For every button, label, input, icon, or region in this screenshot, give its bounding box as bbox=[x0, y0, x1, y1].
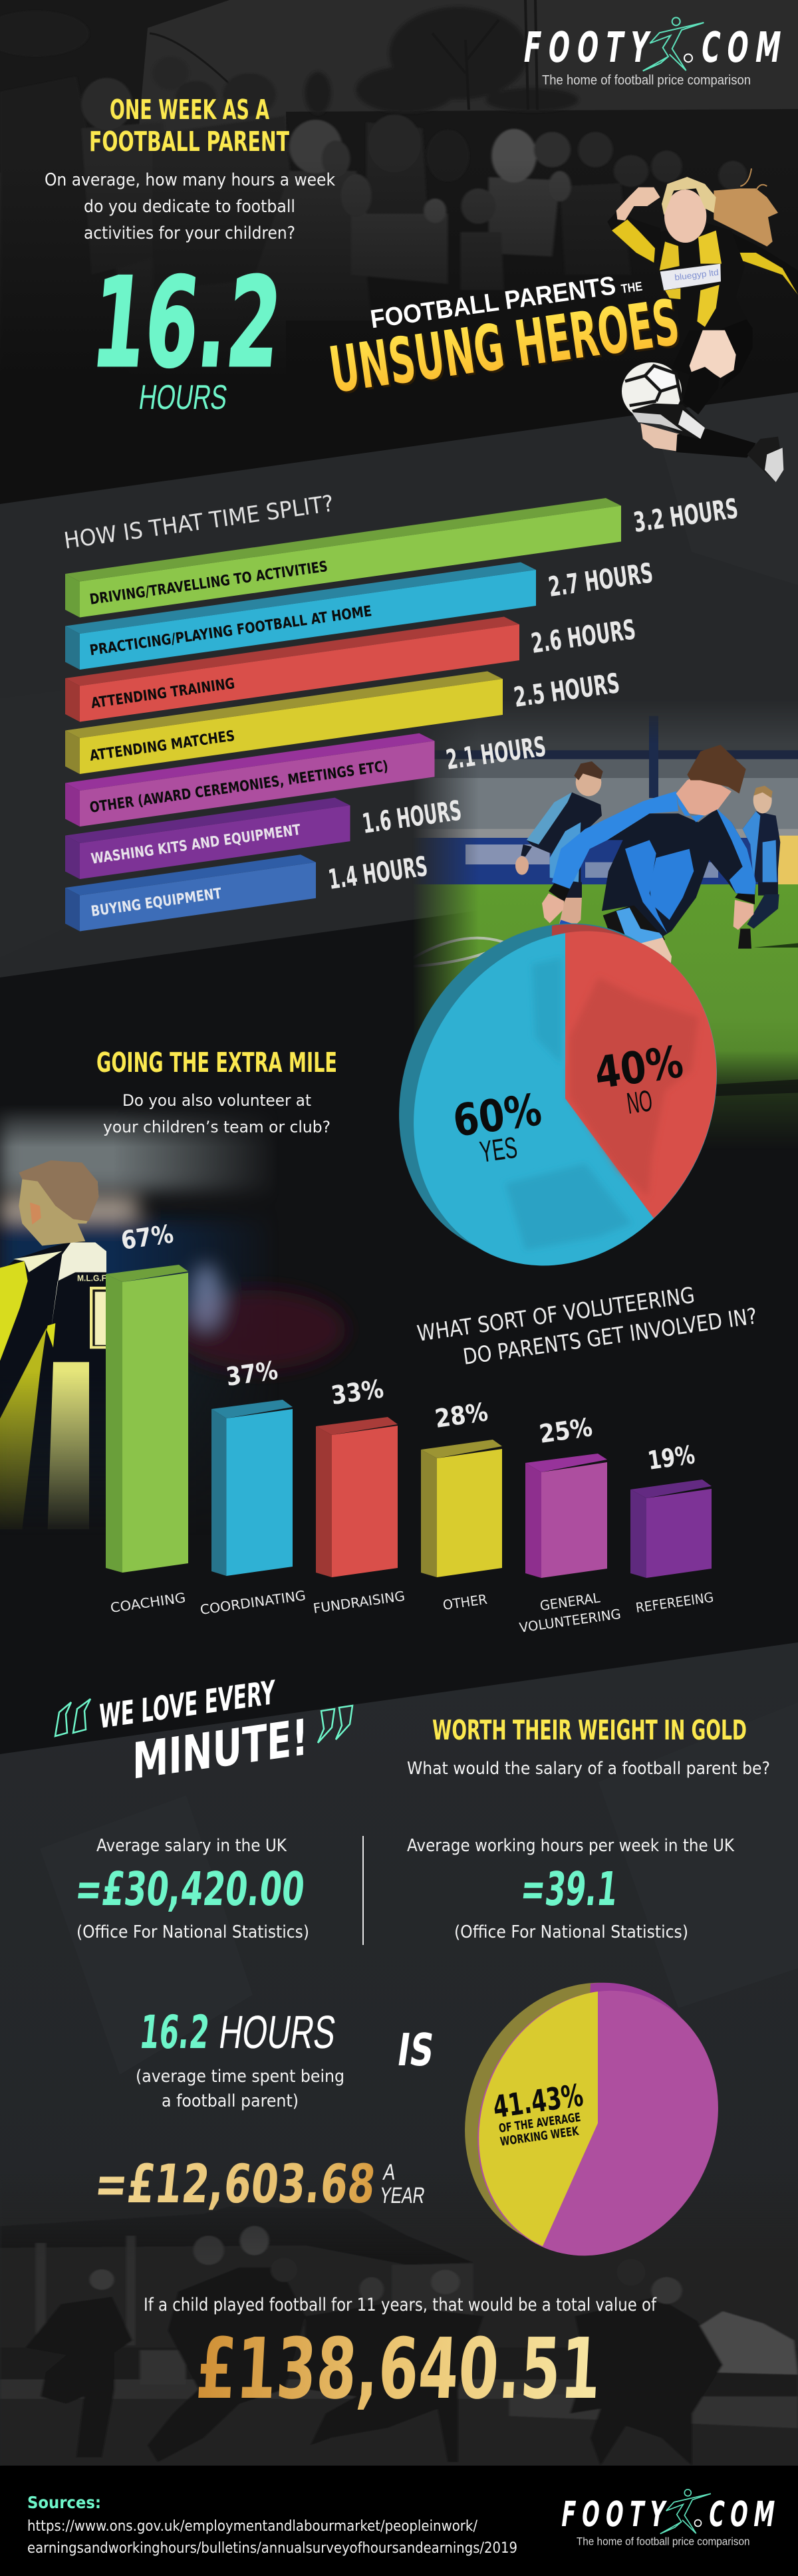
photo: boy footballers on pitch bbox=[406, 698, 798, 1150]
photo: boy in yellow shirt, rear view: M.L.G.F bbox=[77, 1273, 106, 1283]
title: football parents the unsung heroes: FOOTBALL PARENTS bbox=[368, 271, 618, 334]
bar: attending matches: ATTENDING MATCHES bbox=[88, 728, 236, 765]
bar: other 28%: 28% bbox=[433, 1397, 489, 1434]
stat: average working hours: Average working hours per week in the UK bbox=[407, 1836, 735, 1856]
photo: girl footballer bbox=[607, 168, 798, 482]
football bbox=[622, 362, 682, 420]
bar: other: OTHER (AWARD CEREMONIES, MEETINGS ETC) bbox=[88, 758, 389, 817]
stat: average working hours: (Office For National Statistics) bbox=[454, 1922, 688, 1942]
player silhouettes bbox=[25, 2267, 723, 2466]
footer background bbox=[0, 2466, 798, 2576]
bar: refereeing 19%: 19% bbox=[646, 1440, 697, 1476]
text: hours question: On average, how many hours a week bbox=[45, 170, 335, 190]
bar: general volunteering 25%: VOLUNTEERING bbox=[518, 1606, 622, 1636]
stat: average salary: =£30,420.00 bbox=[72, 1862, 307, 1916]
bar: driving bbox=[65, 492, 740, 617]
bar: fundraising 33%: FUNDRAISING bbox=[312, 1588, 406, 1616]
stat: average working hours: =39.1 bbox=[518, 1862, 620, 1916]
label: 60% yes: 60% bbox=[450, 1084, 545, 1147]
stat: average working hours bbox=[407, 1836, 735, 1942]
text: volunteer question: your children’s team or club? bbox=[103, 1118, 331, 1136]
icon: footballer figure bbox=[660, 2490, 711, 2534]
text: hours question: do you dedicate to football bbox=[84, 197, 295, 217]
bar: buying equipment bbox=[65, 850, 430, 931]
label: 40% no: 40% bbox=[592, 1036, 686, 1099]
text: hours question: activities for your children? bbox=[84, 223, 295, 243]
bar: coordinating 37%: 37% bbox=[224, 1355, 279, 1392]
bar: coaching 67%: 67% bbox=[119, 1219, 175, 1255]
stat: average salary bbox=[72, 1836, 309, 1942]
bar: other 28% bbox=[421, 1397, 502, 1613]
stat: 16.2 hours: 16.2 bbox=[86, 251, 287, 395]
text: eleven years value: If a child played football for 11 years, that would be a total value of bbox=[144, 2295, 657, 2315]
bar: refereeing 19%: REFEREEING bbox=[634, 1589, 715, 1616]
bar: coaching 67% bbox=[106, 1219, 188, 1616]
text: volunteer question: Do you also volunteer at bbox=[122, 1091, 311, 1110]
heading: one week as a football parent: ONE WEEK AS A bbox=[110, 94, 269, 126]
bar: refereeing 19% bbox=[630, 1440, 715, 1616]
heading: one week as a football parent bbox=[89, 94, 289, 158]
heading: how is that time split: HOW IS THAT TIME SPLIT? bbox=[63, 490, 335, 555]
logo: footy.com header bbox=[521, 17, 784, 88]
logo: footy.com header: The home of football price comparison bbox=[542, 73, 751, 88]
main player bbox=[542, 745, 756, 966]
bar: attending training bbox=[65, 613, 638, 722]
bar: buying equipment: BUYING EQUIPMENT bbox=[90, 886, 223, 920]
stat: 16.2 hours is: HOURS bbox=[216, 2005, 339, 2058]
text: is: IS bbox=[394, 2024, 438, 2076]
sources: https://www.ons.gov.uk/employmentandlabourmarket/peopleinwork/ bbox=[27, 2518, 478, 2535]
stat: 16.2 hours: HOURS bbox=[136, 378, 229, 417]
title: football parents the unsung heroes bbox=[325, 271, 686, 410]
pie chart: volunteer yes or no bbox=[341, 870, 775, 1319]
stat: 12,603.68 a year: A bbox=[382, 2160, 397, 2185]
bar: practicing: 2.7 HOURS bbox=[547, 557, 655, 603]
photo: celebrating young players bbox=[0, 2210, 798, 2466]
logo: footy.com footer: COM bbox=[706, 2495, 777, 2535]
quote: we love every minute: WE LOVE EVERY bbox=[99, 1673, 275, 1736]
sources: earningsandworkinghours/bulletins/annualsurveyofhoursandearnings/2019 bbox=[27, 2540, 517, 2557]
bar: other 28%: OTHER bbox=[442, 1591, 488, 1613]
label: 60% yes bbox=[450, 1084, 545, 1169]
bar: driving: DRIVING/TRAVELLING TO ACTIVITIES bbox=[88, 559, 329, 608]
title: football parents the unsung heroes: THE bbox=[620, 280, 643, 297]
bar: general volunteering 25%: 25% bbox=[537, 1412, 594, 1449]
photo: boy in yellow shirt, rear view bbox=[0, 1109, 349, 1529]
bar: attending training: 2.6 HOURS bbox=[529, 613, 638, 660]
sources: Sources: bbox=[27, 2493, 101, 2512]
panel: salary background bbox=[0, 1642, 798, 2466]
bar: coordinating 37%: COORDINATING bbox=[199, 1587, 307, 1618]
bar: attending matches: 2.5 HOURS bbox=[512, 667, 622, 713]
logo: footy.com footer: FOOTY bbox=[559, 2495, 668, 2535]
logo: footy.com header: COM bbox=[698, 23, 784, 72]
stat: average salary: Average salary in the UK bbox=[96, 1836, 287, 1856]
icon: footballer figure bbox=[643, 17, 704, 71]
stat: average salary: (Office For National Statistics) bbox=[76, 1922, 309, 1942]
bar: attending matches bbox=[65, 667, 622, 774]
photo: crowd of parents bbox=[0, 0, 798, 512]
heading: what sort of volunteering: WHAT SORT OF VOLUTEERING bbox=[416, 1282, 696, 1347]
bar: general volunteering 25%: GENERAL bbox=[539, 1589, 602, 1614]
stat: 12,603.68 a year: YEAR bbox=[378, 2183, 426, 2208]
bar: practicing: PRACTICING/PLAYING FOOTBALL AT HOME bbox=[88, 603, 373, 659]
icon: closing quote marks bbox=[318, 1706, 352, 1743]
stat: total value: £138,640.51 bbox=[194, 2320, 603, 2418]
stat: 16.2 hours is: 16.2 bbox=[137, 2006, 212, 2059]
logo: footy.com footer: The home of football price comparison bbox=[577, 2535, 750, 2547]
bar: coordinating 37% bbox=[199, 1355, 307, 1618]
bar: driving: 3.2 HOURS bbox=[632, 492, 740, 539]
panel: how is that time split bbox=[63, 490, 740, 931]
bar: washing kits: WASHING KITS AND EQUIPMENT bbox=[90, 822, 302, 868]
photo: girl footballer: bluegyp ltd bbox=[674, 268, 720, 283]
stat: 16.2 hours is: a football parent) bbox=[162, 2091, 299, 2111]
stat: 12,603.68 a year: =£12,603.68 bbox=[92, 2153, 378, 2215]
background player right bbox=[738, 786, 780, 949]
sources bbox=[27, 2493, 517, 2557]
bar: attending training: ATTENDING TRAINING bbox=[90, 676, 236, 712]
background player left bbox=[515, 761, 603, 926]
panel: time split background bbox=[0, 392, 798, 977]
pie chart: share of working week: 41.43% bbox=[491, 2077, 585, 2125]
heading: one week as a football parent: FOOTBALL PARENT bbox=[89, 126, 289, 158]
text: salary question: What would the salary of a football parent be? bbox=[407, 1759, 770, 1779]
bar: practicing bbox=[65, 557, 655, 670]
bar: buying equipment: 1.4 HOURS bbox=[327, 850, 430, 896]
pie chart: share of working week bbox=[422, 1943, 761, 2295]
quote: we love every minute: MINUTE! bbox=[132, 1708, 308, 1791]
label: 40% no: NO bbox=[624, 1083, 654, 1120]
label: 40% no bbox=[592, 1036, 686, 1120]
label: 60% yes: YES bbox=[477, 1130, 519, 1169]
bar: fundraising 33% bbox=[312, 1374, 406, 1616]
pie chart: share of working week: OF THE AVERAGE bbox=[498, 2111, 581, 2136]
heading: what sort of volunteering bbox=[416, 1282, 759, 1370]
stat: 16.2 hours is bbox=[136, 2005, 344, 2111]
bar: fundraising 33%: 33% bbox=[329, 1374, 385, 1410]
stat: 16.2 hours is: (average time spent being bbox=[136, 2067, 344, 2087]
bar: other bbox=[65, 730, 548, 827]
logo: footy.com footer bbox=[559, 2490, 777, 2547]
pie chart: share of working week: WORKING WEEK bbox=[499, 2124, 580, 2149]
text: hours question bbox=[45, 170, 335, 243]
bar chart: types of volunteering bbox=[106, 1219, 715, 1636]
quote: we love every minute bbox=[55, 1673, 352, 1791]
bar: washing kits bbox=[65, 794, 464, 879]
stat: 16.2 hours bbox=[86, 251, 287, 417]
bar: coaching 67%: COACHING bbox=[109, 1589, 187, 1616]
logo: footy.com header: FOOTY bbox=[521, 23, 652, 72]
text: volunteer question bbox=[103, 1091, 331, 1136]
bar: washing kits: 1.6 HOURS bbox=[360, 794, 464, 840]
bar: other: 2.1 HOURS bbox=[444, 730, 548, 776]
icon: opening quote marks bbox=[55, 1699, 90, 1736]
heading: going the extra mile: GOING THE EXTRA MILE bbox=[96, 1047, 337, 1079]
divider bbox=[362, 1836, 364, 1945]
bar: general volunteering 25% bbox=[518, 1412, 622, 1636]
